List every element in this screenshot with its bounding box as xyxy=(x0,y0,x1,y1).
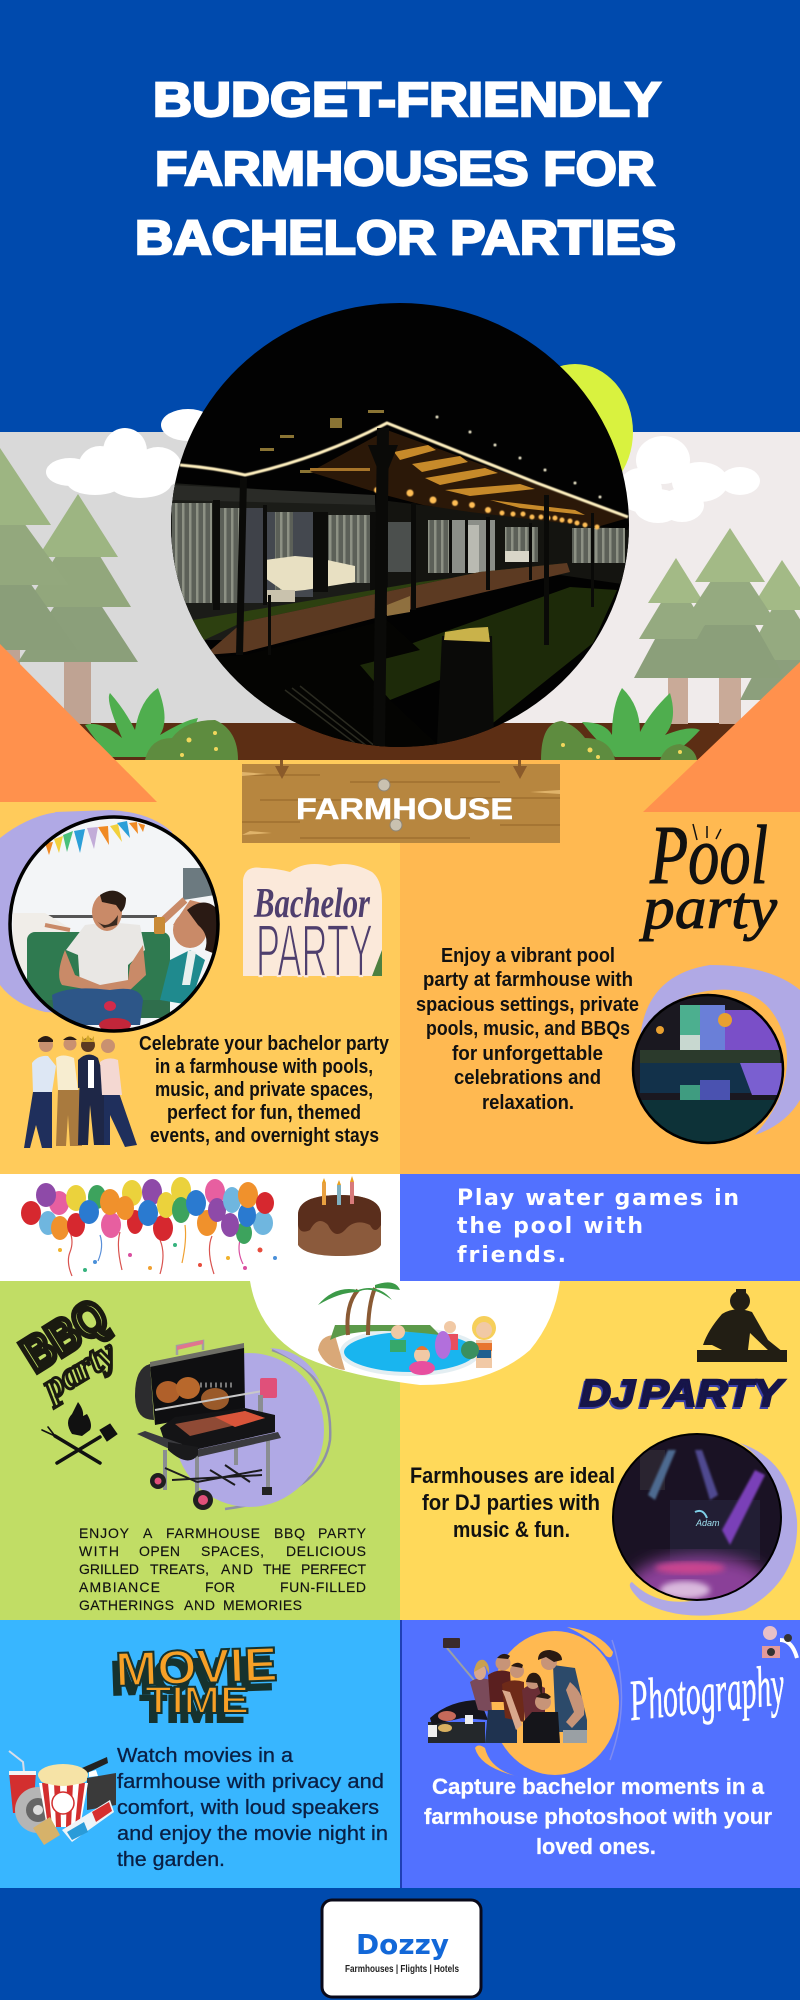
text: bbq description: PARTY xyxy=(318,1525,367,1541)
panel: movie time xyxy=(0,1620,400,1888)
text: pool description: relaxation. xyxy=(482,1092,574,1114)
text: bbq description: BBQ xyxy=(274,1525,305,1541)
logo card xyxy=(322,1900,481,1997)
lettering: bbq party: BBQ xyxy=(13,1290,117,1382)
photo: group selfie xyxy=(428,1638,587,1743)
text: bbq description: DELICIOUS xyxy=(286,1543,366,1559)
text: bbq description: ENJOY xyxy=(79,1525,130,1541)
logo card: Dozzy xyxy=(356,1928,449,1961)
panel: photography xyxy=(400,1620,800,1888)
text: bachelor description: music, and private spaces, xyxy=(155,1079,373,1101)
text: bbq description: A xyxy=(143,1525,153,1541)
panel: balloons strip xyxy=(0,1174,400,1281)
text: bbq description: SPACES, xyxy=(201,1543,264,1559)
text: bbq description: WITH xyxy=(79,1543,119,1559)
text: dj description: Farmhouses are ideal xyxy=(410,1463,615,1488)
lettering: pool party: party xyxy=(639,875,777,941)
text: bbq description: AND xyxy=(221,1561,253,1577)
text: pool description: Enjoy a vibrant pool xyxy=(441,945,615,967)
badge: bachelor party: Bachelor xyxy=(253,881,370,927)
wood sign: farmhouse xyxy=(242,760,560,843)
text: bachelor description: events, and overnight stays xyxy=(150,1125,379,1147)
text: bachelor description xyxy=(139,1033,390,1147)
text: movie description: the garden. xyxy=(117,1849,225,1871)
text: pool description: party at farmhouse with xyxy=(423,969,633,991)
text: bbq description: GATHERINGS xyxy=(79,1597,174,1613)
panel: dj party xyxy=(400,1281,800,1620)
text: photography description: loved ones. xyxy=(536,1834,656,1859)
title: BUDGET-FRIENDLY xyxy=(153,74,661,127)
mullions xyxy=(213,500,468,610)
text: photography description: farmhouse photoshoot with your xyxy=(424,1804,772,1829)
icon: movie snacks xyxy=(9,1751,116,1845)
wood sign: farmhouse: FARMHOUSE xyxy=(296,793,513,826)
text: bbq description: TREATS, xyxy=(150,1561,209,1577)
text: movie description xyxy=(117,1745,388,1871)
title: FARMHOUSES FOR xyxy=(155,143,655,196)
panel: orange corner triangles xyxy=(0,644,800,812)
text: pool description xyxy=(416,945,639,1114)
photo: pool at night xyxy=(633,995,785,1145)
panel: bbq party xyxy=(0,1281,400,1620)
text: photography description: Capture bachelor moments in a xyxy=(432,1774,765,1799)
footer band xyxy=(0,1888,800,2000)
front wall xyxy=(171,483,380,640)
lettering: movie time: TIME xyxy=(145,1680,249,1722)
title xyxy=(135,74,676,265)
plants left xyxy=(85,688,238,760)
photo: dj lights: Adam xyxy=(695,1518,720,1528)
clouds right xyxy=(618,436,760,523)
bed xyxy=(265,556,355,592)
panel: farm landscape scene xyxy=(0,364,800,761)
text: pool description: for unforgettable xyxy=(452,1043,603,1065)
illustration: four friends xyxy=(24,1035,137,1148)
text: bbq description: AND xyxy=(184,1597,215,1613)
text: bbq description: THE xyxy=(263,1561,291,1577)
text: pool description: spacious settings, private xyxy=(416,994,639,1016)
badge: bachelor party: PARTY xyxy=(256,909,373,992)
photo: dj lights xyxy=(612,1433,782,1615)
string lights xyxy=(180,416,628,530)
panel: pool party xyxy=(400,760,800,1174)
balloons xyxy=(21,1177,277,1276)
text: dj description: music & fun. xyxy=(453,1517,570,1542)
lettering: movie time xyxy=(115,1638,278,1722)
sun xyxy=(517,364,633,500)
text: bachelor description: in a farmhouse with pools, xyxy=(155,1056,373,1078)
trees left xyxy=(0,448,138,725)
pillars xyxy=(236,428,594,747)
text: bbq description: GRILLED xyxy=(79,1561,139,1577)
text: bbq description: AMBIANCE xyxy=(79,1579,160,1595)
lettering: pool party xyxy=(639,809,777,941)
text: movie description: farmhouse with privacy and xyxy=(117,1771,384,1793)
trees right xyxy=(634,528,800,724)
upper roof beams xyxy=(260,410,384,473)
text: bbq description: FARMHOUSE xyxy=(166,1525,260,1541)
text: water games: Play water games in xyxy=(457,1186,739,1211)
crescent and lavender circle behind grill xyxy=(174,1348,330,1509)
crescent decoration xyxy=(630,1443,797,1616)
text: pool description: pools, music, and BBQs xyxy=(426,1018,630,1040)
text: pool description: celebrations and xyxy=(454,1067,601,1089)
lettering: movie time: MOVIE xyxy=(115,1638,278,1697)
deck xyxy=(205,563,570,655)
lower dark band and lawn xyxy=(360,587,617,722)
text: water games: friends. xyxy=(457,1243,566,1268)
text: bbq description xyxy=(79,1525,367,1613)
crescent decoration xyxy=(640,965,800,1135)
windows xyxy=(172,503,212,603)
text: movie description: comfort, with loud speakers xyxy=(117,1797,379,1819)
top background band xyxy=(0,0,800,440)
white blob with pool illustration xyxy=(250,1281,560,1385)
text: bbq description: OPEN xyxy=(139,1543,180,1559)
icon: camera corner xyxy=(762,1626,797,1658)
title: BACHELOR PARTIES xyxy=(135,212,676,265)
text: dj description xyxy=(410,1463,615,1542)
panel: hero farmhouse night photo xyxy=(171,302,629,747)
logo card: Farmhouses | Flights | Hotels xyxy=(345,1963,459,1975)
text: bbq description: FUN-FILLED xyxy=(280,1579,366,1595)
text: photography description xyxy=(424,1774,772,1859)
badge: bachelor party xyxy=(243,864,382,992)
icon: crossed fork and spatula xyxy=(42,1402,117,1463)
text: bbq description: MEMORIES xyxy=(223,1597,302,1613)
post cap xyxy=(444,627,490,642)
photo: friends on sofa xyxy=(10,817,220,1032)
text: dj description: for DJ parties with xyxy=(422,1490,600,1515)
illustration: pool and kids xyxy=(318,1282,496,1375)
lettering: bbq party xyxy=(13,1290,124,1409)
lettering: dj party: DJ PARTY xyxy=(580,1373,786,1415)
orange circle backdrop xyxy=(475,1627,622,1777)
text: water games xyxy=(457,1186,739,1268)
text: movie description: and enjoy the movie night in xyxy=(117,1823,388,1845)
text: bbq description: PERFECT xyxy=(301,1561,366,1577)
text: bachelor description: Celebrate your bachelor party xyxy=(139,1033,390,1055)
lawn strip xyxy=(193,563,567,642)
text: bachelor description: perfect for fun, themed xyxy=(167,1102,361,1124)
text: movie description: Watch movies in a xyxy=(117,1745,294,1767)
panel: water games xyxy=(400,1174,800,1281)
panel: bachelor party xyxy=(0,760,400,1174)
plants right xyxy=(541,688,700,760)
text: water games: the pool with xyxy=(457,1214,643,1239)
lettering: bbq party: party xyxy=(33,1331,124,1409)
crescent decoration xyxy=(0,810,172,1015)
icon: birthday cake xyxy=(298,1176,381,1256)
clouds left xyxy=(46,409,215,498)
icon: dj silhouette xyxy=(697,1289,787,1362)
text: bbq description: FOR xyxy=(205,1579,235,1595)
illustration: grill xyxy=(135,1340,281,1510)
roof underside xyxy=(310,430,628,527)
